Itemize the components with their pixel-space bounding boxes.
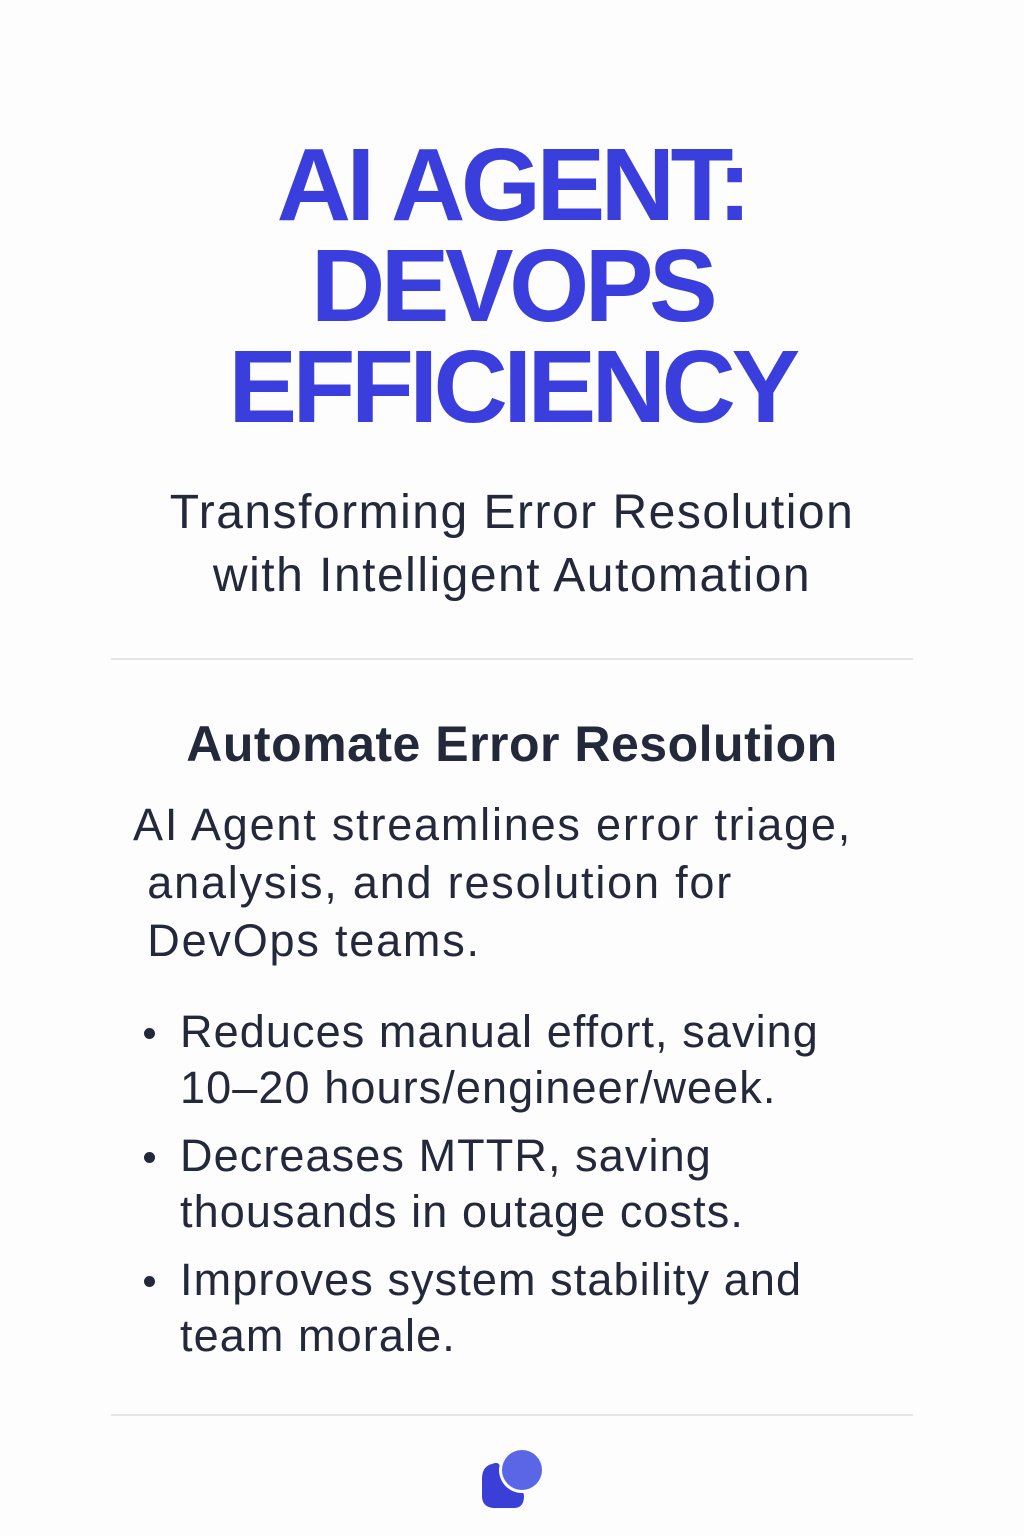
subtitle: with Intelligent Automation <box>213 549 811 602</box>
bullet list <box>144 1006 819 1361</box>
bullet: manual effort: 10–20 hours/engineer/week. <box>180 1062 777 1113</box>
subtitle <box>170 486 854 602</box>
bullet: manual effort: Reduces manual effort, saving <box>180 1006 819 1057</box>
bullet: MTTR <box>140 1128 819 1240</box>
bullet: stability: Improves system stability and <box>180 1254 802 1305</box>
bullet: stability: team morale. <box>180 1310 456 1361</box>
bullet: MTTR: Decreases MTTR, saving <box>180 1130 712 1181</box>
title: DEVOPS <box>311 228 713 343</box>
title: EFFICIENCY <box>228 329 796 444</box>
subtitle: Transforming Error Resolution <box>170 486 854 539</box>
bullet: stability <box>140 1252 819 1364</box>
description paragraph <box>133 799 852 966</box>
description paragraph: analysis, and resolution for <box>147 857 733 908</box>
title <box>228 127 798 444</box>
title: AI AGENT: <box>277 127 747 242</box>
description paragraph: AI Agent streamlines error triage, <box>133 799 852 850</box>
icon: logo <box>482 1450 542 1508</box>
bullet: MTTR: thousands in outage costs. <box>180 1186 744 1237</box>
description paragraph: DevOps teams. <box>147 915 481 966</box>
section heading: Automate Error Resolution <box>186 716 838 772</box>
bullet: manual effort <box>140 1004 819 1116</box>
